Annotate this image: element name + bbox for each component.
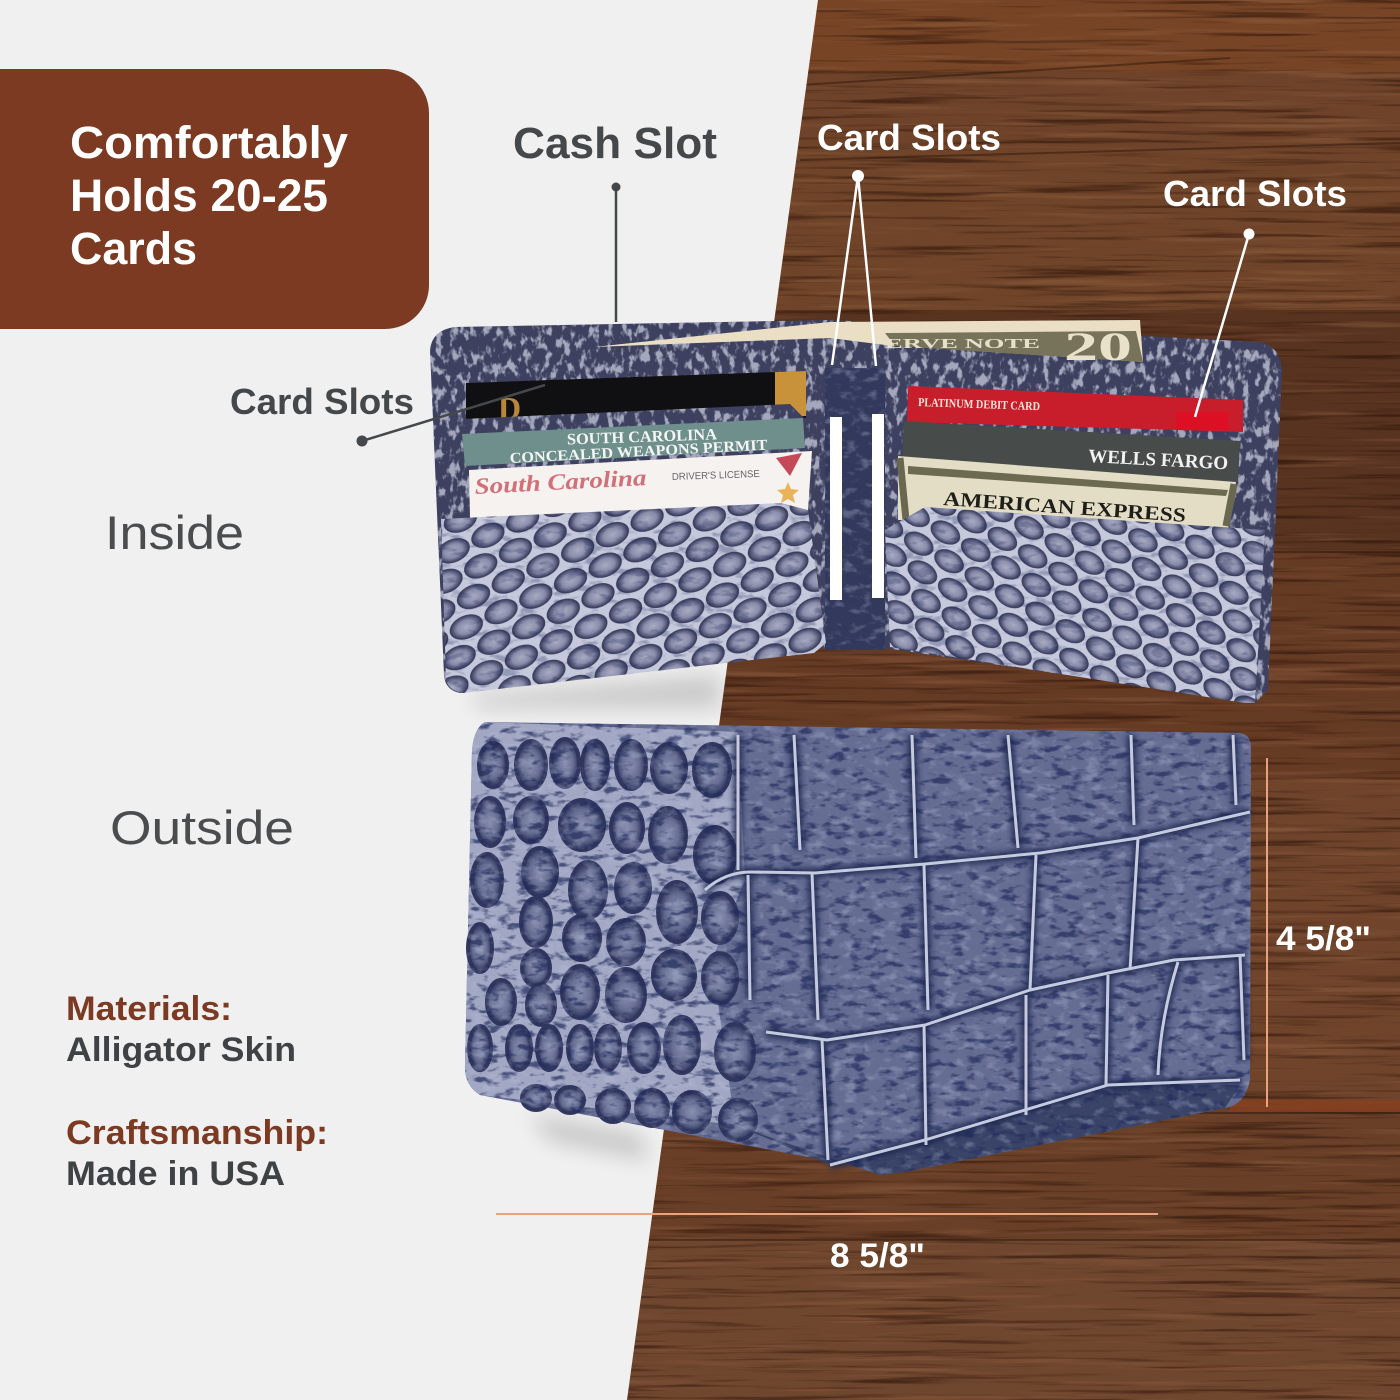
large scale shadows [705, 735, 1250, 1165]
callout: card slots right: Card Slots [1163, 173, 1347, 214]
left pocket [441, 503, 826, 693]
large scale ridges [705, 735, 1250, 1165]
left cards [440, 371, 812, 518]
american express card [898, 456, 1236, 530]
callout: cash slot: Cash Slot [513, 119, 717, 168]
craftsmanship text: Craftsmanship: [66, 1114, 328, 1152]
shadow [530, 1115, 650, 1160]
dimension: height: 4 5/8" [1276, 920, 1371, 958]
banknote: ERVE NOTE [885, 337, 1040, 352]
banknote: 20 [1064, 324, 1132, 369]
license card: DRIVER'S LICENSE [672, 469, 760, 483]
black card: D [498, 390, 521, 426]
shadow [470, 675, 720, 708]
background: light diagonal panel [0, 0, 818, 1400]
craftsmanship text: Made in USA [66, 1155, 285, 1193]
right cards [898, 386, 1243, 530]
red debit card: PLATINUM DEBIT CARD [918, 395, 1041, 413]
leather band over black card [440, 404, 806, 450]
black card [466, 371, 806, 430]
heading text: Comfortably [70, 117, 348, 168]
wallet outside [465, 722, 1251, 1175]
leather mottling [465, 722, 1251, 1175]
callout: card slots right [1163, 173, 1347, 417]
callout: card slots middle: Card Slots [817, 117, 1001, 158]
label: inside: Inside [105, 506, 244, 559]
materials text: Alligator Skin [66, 1031, 296, 1069]
spine white strips [830, 414, 884, 600]
heading panel [0, 69, 429, 329]
dimension: width: 8 5/8" [830, 1237, 925, 1275]
wallet body [465, 722, 1251, 1175]
materials text: Materials: [66, 990, 232, 1028]
spine [825, 368, 885, 650]
license card: South Carolina [474, 465, 647, 499]
bottom edge strip [735, 1085, 1240, 1175]
right pocket [885, 507, 1265, 703]
permit card [462, 418, 805, 467]
callout: card slots left [230, 381, 545, 446]
craftsmanship text [66, 1114, 328, 1193]
callout: card slots left: Card Slots [230, 381, 414, 422]
american express card: AMERICAN EXPRESS [943, 488, 1187, 527]
license card [469, 451, 812, 518]
heading text: Holds 20-25 [70, 170, 328, 221]
small scales, left side [465, 722, 756, 1140]
wallet inside [430, 320, 1282, 708]
permit card: SOUTH CAROLINA [567, 426, 718, 449]
callout: cash slot [513, 119, 717, 322]
heading text: Cards [70, 223, 197, 274]
callout: card slots middle [817, 117, 1001, 366]
banknote [594, 320, 1143, 369]
wells fargo card: WELLS FARGO [1088, 446, 1229, 474]
label: outside: Outside [110, 801, 294, 854]
red debit card [907, 386, 1243, 432]
permit card: CONCEALED WEAPONS PERMIT [509, 438, 768, 467]
materials text [66, 990, 296, 1069]
wallet lining [430, 320, 1282, 703]
wells fargo card [902, 421, 1240, 482]
